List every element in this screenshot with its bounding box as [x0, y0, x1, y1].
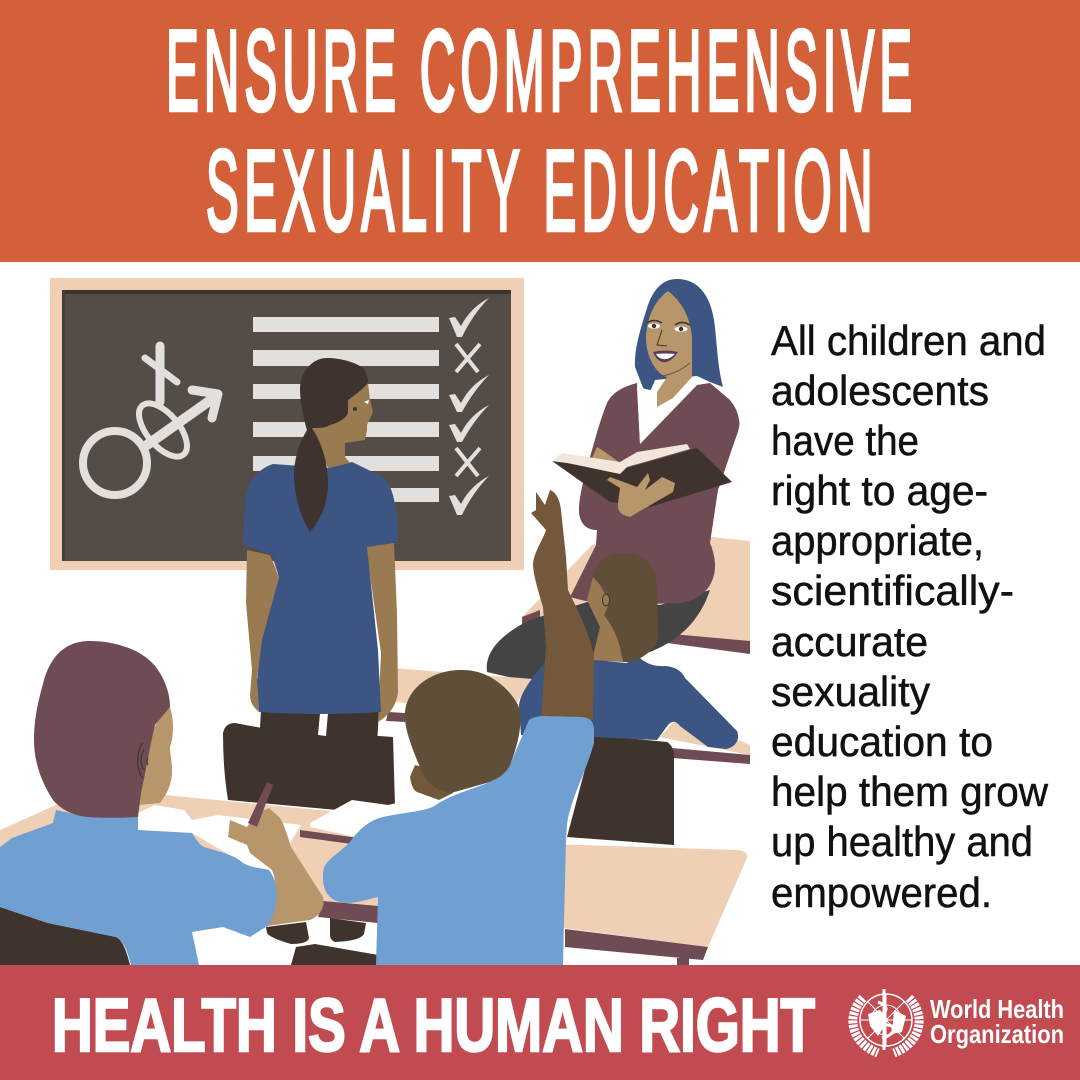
neck and face — [312, 383, 373, 468]
arms — [246, 550, 279, 712]
header banner — [0, 0, 1080, 262]
title: SEXUALITY EDUCATION — [206, 127, 873, 255]
body text: scientifically- — [771, 567, 1014, 614]
body text: adolescents — [771, 367, 989, 414]
face and neck — [587, 577, 623, 662]
teacher shirt — [637, 377, 697, 444]
open book — [552, 444, 732, 507]
head — [405, 670, 520, 793]
notebook near front student — [310, 793, 439, 838]
checklist — [253, 298, 489, 515]
back student — [519, 553, 738, 845]
teacher face — [646, 291, 692, 407]
body text: help them grow — [771, 768, 1049, 815]
body text: appropriate, — [771, 517, 984, 564]
body text: education to — [771, 718, 993, 765]
hair — [34, 641, 170, 818]
chair — [223, 723, 395, 810]
standing student — [223, 358, 398, 810]
teacher — [487, 279, 740, 682]
hair and ponytail — [294, 358, 368, 532]
slogan: HEALTH IS A HUMAN RIGHT — [52, 983, 815, 1067]
front desks — [0, 795, 747, 965]
raised-hand student — [323, 490, 594, 965]
trousers — [259, 710, 379, 745]
body text: right to age- — [771, 467, 988, 514]
illustration: classroom scene — [0, 278, 750, 965]
footer banner — [0, 965, 1080, 1080]
title — [166, 7, 912, 255]
body text: accurate — [771, 618, 928, 665]
open notebook — [138, 805, 301, 870]
body text — [771, 317, 1049, 916]
shirt — [519, 658, 738, 749]
chalkboard — [50, 278, 524, 570]
body text: up healthy and — [771, 818, 1033, 865]
body text: sexuality — [771, 668, 930, 715]
shirt — [0, 810, 279, 965]
front-left student — [0, 641, 366, 965]
bottom chair — [291, 944, 436, 965]
icon: WHO emblem — [853, 989, 919, 1053]
chair — [0, 907, 130, 965]
teacher crossed arm hand — [592, 447, 625, 475]
title: ENSURE COMPREHENSIVE — [166, 7, 912, 135]
icon: gender symbols — [83, 346, 218, 495]
teacher trousers — [487, 590, 710, 682]
raised arm — [531, 490, 594, 720]
ear — [138, 743, 148, 778]
neck and ear — [410, 765, 453, 800]
teacher hand on book — [607, 473, 675, 517]
arm and hand — [228, 808, 324, 926]
body text: have the — [771, 417, 919, 464]
face — [138, 707, 173, 805]
hair — [593, 553, 658, 662]
body text: empowered. — [771, 869, 992, 916]
teacher desk — [522, 537, 750, 654]
WHO wordmark — [930, 994, 1064, 1049]
teacher sweater — [570, 383, 740, 605]
body text: All children and — [771, 317, 1046, 364]
chair — [567, 735, 674, 845]
pencil — [248, 782, 273, 827]
middle desk — [380, 667, 750, 764]
teacher hair — [635, 279, 723, 398]
dress — [243, 462, 398, 714]
shirt — [323, 716, 594, 965]
shoes — [266, 922, 309, 944]
